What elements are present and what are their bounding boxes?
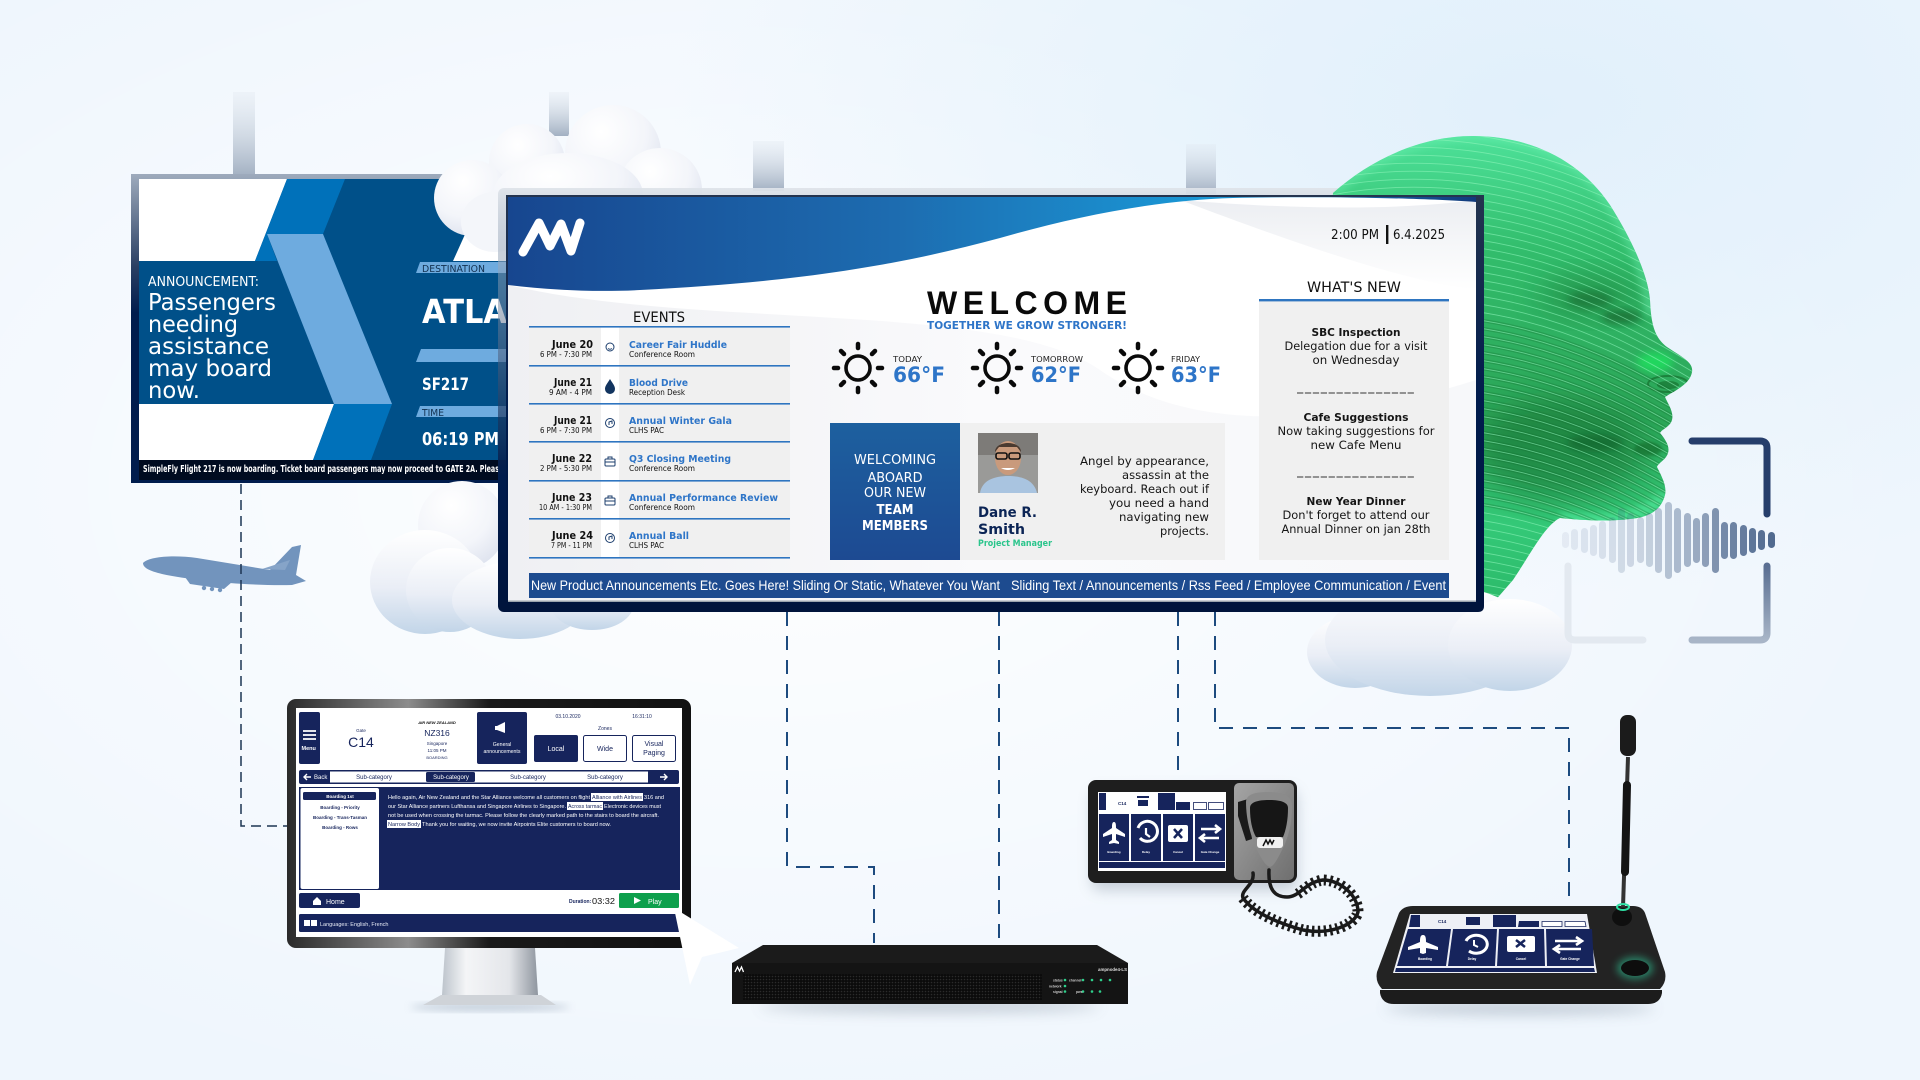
announcement script panel: 316 and <box>644 795 664 801</box>
status LEDs and labels: status <box>1053 978 1063 982</box>
screen graphics <box>139 179 520 460</box>
panel touchscreen <box>1098 792 1226 871</box>
flight details: TIME <box>421 408 444 419</box>
header row <box>299 712 676 764</box>
header row: 03.10.2020 <box>555 714 581 720</box>
welcome heading: TOGETHER WE GROW STRONGER! <box>927 319 1127 332</box>
cloud: top left <box>434 105 702 252</box>
flight details: SF217 <box>422 375 469 395</box>
sub-category navigation: Sub-category <box>587 775 623 781</box>
bio paragraph: keyboard. Reach out if <box>1080 482 1210 496</box>
event: Blood Drive: Blood Drive <box>629 378 688 389</box>
scan brackets <box>1568 441 1767 640</box>
item: cafe suggestions: Now taking suggestions for <box>1278 424 1435 438</box>
weather: today <box>834 344 945 392</box>
sub-category navigation: Back <box>314 775 328 781</box>
home, duration and play controls <box>299 893 679 908</box>
amplifier model label: ampnode4-LS <box>1098 967 1127 972</box>
status LEDs and labels: network <box>1049 984 1062 988</box>
item: new year dinner: Don't forget to attend our <box>1282 508 1430 522</box>
event: Annual Ball: CLHS PAC <box>629 541 664 550</box>
panel: main welcome display <box>506 195 1484 612</box>
blue header wave <box>508 197 1476 291</box>
header row: Gate <box>356 728 366 733</box>
sub-category navigation <box>299 770 679 784</box>
event: Career Fair Huddle: June 20 <box>551 339 593 351</box>
announcement text: needing <box>148 312 238 338</box>
item: cafe suggestions: Cafe Suggestions <box>1304 411 1409 424</box>
home, duration and play controls: Home <box>326 899 345 906</box>
event: Career Fair Huddle: 6 PM - 7:30 PM <box>540 350 592 359</box>
event: Q3 Closing Meeting: Q3 Closing Meeting <box>629 454 731 465</box>
panel: welcoming new team members <box>830 423 1225 560</box>
profile card: Project Manager <box>978 539 1053 549</box>
event: Annual Ball: Annual Ball <box>629 531 689 542</box>
header row: Visual <box>645 741 664 748</box>
item: new year dinner: Annual Dinner on jan 28th <box>1282 522 1430 536</box>
panel touchscreen: Boarding <box>1107 850 1121 854</box>
header row: Singapore <box>427 741 448 746</box>
announcement script panel: Thank you for waiting, we now invite Airpoints Elite customers to board now. <box>422 822 611 828</box>
announcement script panel: Boarding - Trans-Tasman <box>313 815 367 820</box>
icon: delay clock <box>1466 935 1487 953</box>
events heading: EVENTS <box>633 310 685 326</box>
header row: Paging <box>643 750 665 757</box>
welcoming box: ABOARD <box>868 470 922 486</box>
panel touchscreen: Delay <box>1142 850 1150 854</box>
announcement text: now. <box>148 378 200 404</box>
event: Annual Winter Gala <box>540 415 732 435</box>
date and time <box>1331 225 1445 244</box>
item: new year dinner: New Year Dinner <box>1306 495 1406 508</box>
icon: boarding plane <box>1103 822 1125 844</box>
icon: gate change arrows <box>1200 825 1220 842</box>
device: amplifier rack unit <box>732 945 1128 1012</box>
event: Q3 Closing Meeting: 2 PM - 5:30 PM <box>540 464 592 473</box>
event: Annual Winter Gala: Annual Winter Gala <box>629 416 732 427</box>
event: Blood Drive: 9 AM - 4 PM <box>549 388 592 397</box>
news ticker: Sliding Text / Announcements / Rss Feed / Employee Communication / Event <box>1011 577 1446 593</box>
announcement script panel: Boarding - Priority <box>320 805 360 810</box>
sub-category navigation: Sub-category <box>510 775 546 781</box>
bio paragraph: Angel by appearance, <box>1080 454 1209 468</box>
welcoming box: MEMBERS <box>862 518 928 534</box>
languages bar: Languages: English, French <box>320 922 388 928</box>
item: cafe suggestions <box>1278 411 1435 452</box>
announcement script panel: not be used when crossing the tarmac. Please follow the clearly marked path to the stairs to board the aircraft. <box>388 813 659 819</box>
status LEDs and labels <box>1049 978 1111 994</box>
announcement script panel: Across tarmac <box>568 804 602 810</box>
welcoming box: TEAM <box>876 502 914 518</box>
profile card: Smith <box>978 522 1025 538</box>
welcoming box: WELCOMING <box>854 452 936 468</box>
announcement script panel: Alliance with Airlines <box>592 795 642 801</box>
handset plate <box>1234 783 1294 880</box>
header row: 16:31:10 <box>632 714 652 720</box>
announcement script panel: Hello again, Air New Zealand and the Star Alliance welcome all customers on flight <box>388 795 591 801</box>
date and time: 2:00 PM <box>1331 228 1379 243</box>
weather: tomorrow: 62°F <box>1031 363 1081 387</box>
weather: tomorrow: TOMORROW <box>1030 355 1083 364</box>
ticker <box>139 460 519 480</box>
green voice head <box>1332 136 1692 598</box>
display frame <box>131 174 521 483</box>
home, duration and play controls: Duration: <box>569 899 592 905</box>
icon: cursor arrow <box>674 908 739 985</box>
event: Annual Ball <box>551 530 689 550</box>
welcoming box: OUR NEW <box>864 485 926 501</box>
event: Annual Winter Gala: CLHS PAC <box>629 426 664 435</box>
amplifier logo <box>735 967 744 972</box>
weather: friday: 63°F <box>1171 363 1221 387</box>
console touchscreen <box>1393 914 1597 973</box>
announcement text: assistance <box>148 334 269 360</box>
weather: friday <box>1114 344 1221 392</box>
status LEDs and labels: pws <box>1076 990 1083 994</box>
weather: tomorrow <box>973 344 1083 392</box>
header row: NZ316 <box>424 728 450 738</box>
icon: delay clock <box>1138 821 1157 841</box>
monitor stand <box>410 948 570 1011</box>
device: wall-mounted control panel with handset <box>1088 780 1358 931</box>
weather: today: TODAY <box>892 355 922 364</box>
event: Blood Drive: Reception Desk <box>629 388 686 397</box>
profile card <box>960 423 1225 560</box>
console touchscreen: Cancel <box>1516 957 1526 961</box>
header row: General <box>493 742 511 748</box>
monitor bezel <box>287 699 691 948</box>
panel touchscreen: C14 <box>1118 801 1127 806</box>
event: Annual Ball: June 24 <box>551 530 593 542</box>
event: Q3 Closing Meeting: June 22 <box>551 453 592 465</box>
home, duration and play controls: 03:32 <box>592 896 615 906</box>
header row: Wide <box>597 746 613 753</box>
announcement script panel: Boarding 1st <box>326 794 354 799</box>
display frame <box>506 195 1484 612</box>
console touchscreen: C14 <box>1438 919 1447 924</box>
welcoming box <box>830 423 960 560</box>
screen background <box>508 197 1476 602</box>
bio paragraph: navigating new <box>1119 510 1209 524</box>
header row: announcements <box>484 749 521 755</box>
main display translucent outer frame <box>498 188 1484 612</box>
announcement script panel <box>299 787 680 890</box>
bio paragraph <box>1080 454 1210 538</box>
flight details <box>421 264 507 450</box>
item: cafe suggestions: new Cafe Menu <box>1310 438 1402 452</box>
bio paragraph: you need a hand <box>1109 496 1209 510</box>
announcement script panel: Boarding - Rows <box>322 825 358 830</box>
header row: Zones <box>598 726 612 732</box>
console touchscreen: Boarding <box>1418 957 1432 961</box>
languages bar <box>299 914 680 932</box>
flight details: 06:19 PM <box>422 429 499 450</box>
ceiling mount poles <box>233 92 1216 194</box>
ticker: SimpleFly Flight 217 is now boarding. Ticket board passengers may now proceed to GATE 2A. Pleas <box>143 464 499 475</box>
header row: Local <box>548 746 565 753</box>
portrait photo <box>978 433 1038 493</box>
event: Career Fair Huddle: Conference Room <box>629 350 695 359</box>
announcement text: Passengers <box>148 290 276 316</box>
panel: events <box>529 310 790 559</box>
gooseneck microphone <box>1612 715 1636 926</box>
console touchscreen: Gate Change <box>1560 957 1580 961</box>
announcement text: ANNOUNCEMENT: <box>148 275 259 290</box>
header row: AIR NEW ZEALAND <box>417 720 456 725</box>
console touchscreen: Delay <box>1468 957 1476 961</box>
icon: boarding plane <box>1408 935 1438 954</box>
welcome heading: WELCOME <box>927 285 1127 321</box>
panel touchscreen: Gate Change <box>1201 850 1220 854</box>
status LEDs and labels: signal <box>1053 990 1063 994</box>
event: Annual Performance Review: Annual Performance Review <box>629 493 778 504</box>
weather forecast <box>834 344 1221 392</box>
event: Annual Winter Gala: June 21 <box>553 415 592 427</box>
row backgrounds <box>529 326 790 559</box>
event: Annual Performance Review: 10 AM - 1:30 PM <box>539 503 592 512</box>
header row: C14 <box>348 734 374 750</box>
panel touchscreen: Cancel <box>1173 850 1183 854</box>
item: SBC inspection: on Wednesday <box>1312 353 1400 367</box>
coiled cord <box>1243 870 1358 931</box>
date and time: 6.4.2025 <box>1393 228 1445 243</box>
home, duration and play controls: Play <box>648 899 662 906</box>
icon: airplane silhouette <box>143 545 306 592</box>
event: Career Fair Huddle <box>540 339 727 359</box>
icon: gate change arrows <box>1554 937 1582 953</box>
announcement script panel: our Star Alliance partners Lufthansa and Singapore Airlines to Singapore. <box>388 804 566 810</box>
sub-category navigation: Sub-category <box>433 775 469 781</box>
announcement script panel: Electronic devices must <box>604 804 662 810</box>
news ticker: New Product Announcements Etc. Goes Here! Sliding Or Static, Whatever You Want <box>531 577 1000 593</box>
event: Annual Performance Review: Conference Room <box>629 503 695 512</box>
handset microphone <box>1238 792 1292 867</box>
item: SBC inspection <box>1284 326 1428 367</box>
event: Annual Ball: 7 PM - 11 PM <box>551 541 592 550</box>
device: desktop monitor with paging software <box>287 699 691 1011</box>
logo <box>523 223 580 252</box>
icon: cancel <box>1168 825 1188 842</box>
waveform bars <box>1562 502 1775 579</box>
flight details: ATLA <box>422 292 507 331</box>
panel: airport gate display <box>131 174 521 483</box>
announcement script panel: Narrow Body <box>388 822 420 828</box>
flight details: DESTINATION <box>422 264 485 275</box>
header row: BOARDING <box>426 755 448 760</box>
announcement text: may board <box>148 356 272 382</box>
cloud: lower left <box>370 481 634 639</box>
item: SBC inspection: Delegation due for a visit <box>1284 339 1428 353</box>
item: SBC inspection: SBC Inspection <box>1312 326 1400 339</box>
device: desktop paging microphone <box>1377 715 1665 1014</box>
bio paragraph: assassin at the <box>1122 468 1209 482</box>
event: Annual Performance Review <box>539 492 778 512</box>
lit push button <box>1617 957 1653 979</box>
weather: friday: FRIDAY <box>1171 355 1200 364</box>
header row: Menu <box>302 746 316 752</box>
event: Blood Drive: June 21 <box>553 377 592 389</box>
weather: today: 66°F <box>893 363 945 387</box>
what's new heading: WHAT'S NEW <box>1307 280 1401 296</box>
event: Q3 Closing Meeting: Conference Room <box>629 464 695 473</box>
bio paragraph: projects. <box>1160 524 1209 538</box>
header row: 11:05 PM <box>428 748 447 753</box>
icon: cancel <box>1507 936 1535 952</box>
event: Annual Winter Gala: 6 PM - 7:30 PM <box>540 426 592 435</box>
panel: what's new <box>1259 280 1449 560</box>
event: Blood Drive <box>549 377 688 397</box>
news ticker <box>529 573 1449 598</box>
cloud: lower right <box>1307 584 1572 696</box>
event: Annual Performance Review: June 23 <box>551 492 592 504</box>
announcement text <box>148 275 276 404</box>
connector lines <box>241 484 1569 945</box>
event: Q3 Closing Meeting <box>540 453 731 473</box>
item: new year dinner <box>1282 495 1430 536</box>
monitor screen <box>296 708 682 937</box>
profile card: Dane R. <box>978 505 1037 521</box>
status LEDs and labels: channel <box>1069 978 1082 982</box>
sub-category navigation: Sub-category <box>356 775 392 781</box>
event: Career Fair Huddle: Career Fair Huddle <box>629 340 727 351</box>
